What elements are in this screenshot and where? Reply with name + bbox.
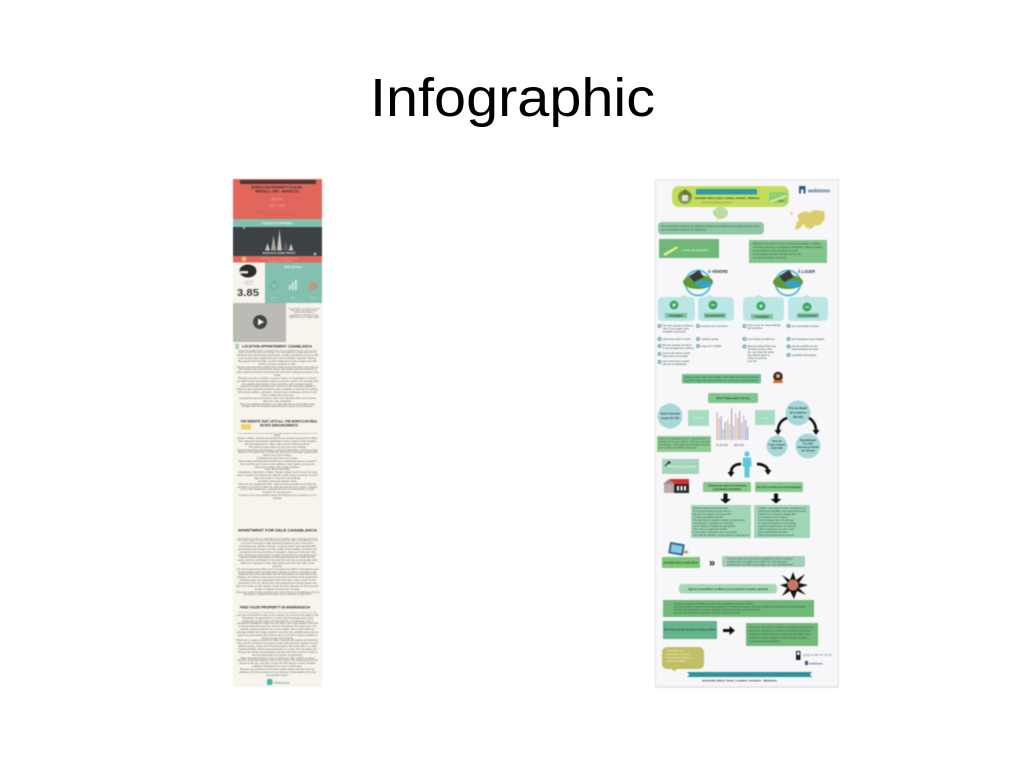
panel: rent disadvantages: Inconvénients [799, 314, 818, 318]
text block: Marrakech: Villas and apartments in recent residences offer modern comfort, security, pools and parking close to the shops, the restaurants and the airport of the city, and they remain the first choice of many families settling in Marrakech for work or retirement. [237, 656, 318, 668]
title: Infographic [370, 68, 655, 128]
text box: investment: de charges, votre rapport locatif après 20 ans [658, 442, 710, 446]
callout: key: Devenir propriétaire [669, 464, 697, 468]
heading: à louer: À LOUER [798, 268, 816, 274]
speech bubble: contact: vente et location [667, 659, 686, 663]
circle: mortgage: sur 20 ans [801, 448, 815, 452]
text block: location: Visit each apartment before you sign and ask for the details of the charges and the deposit required by the owner of the property. [240, 403, 315, 408]
panel: right infographic, Webimmo [654, 178, 840, 688]
text box: renting details: à l'entretien de la maison [758, 515, 789, 519]
text pill: comparison: pour bien choisir vos décisions dans les prochaines années au Maroc [684, 378, 759, 382]
header banner: Immobilier Maroc Vente, Location, Annuaire - Webimmo [695, 196, 760, 200]
text box: agency details: sur tout le territoire marocain et pour tous vos biens [674, 610, 741, 614]
panel: red header: 1200 – 2015 [269, 204, 286, 208]
text box: buying details: Montant d'achat et remboursement [693, 506, 728, 510]
panel: dark chart with spikes [233, 227, 322, 256]
text box: buying details: de la maison et charge de copropriété [693, 524, 736, 528]
text box: investment: Ayant cet investissement de 1 million dirhams en [658, 436, 710, 440]
text box: answer: trouver un loyer adapté à votre budget familial [749, 636, 807, 640]
text box: answer: et à vos besoins quotidiens [749, 639, 781, 643]
video placeholder with play button [233, 303, 286, 342]
text block: beside video: Real estate in Morocco and the main offers for apartments, villas and houses in Casablanca, Marrakech and Rabat for every budget today [288, 308, 320, 319]
list: sale advantages: rentables (propriété) [662, 330, 686, 334]
circle: rent [766, 436, 788, 456]
text box: renting details: Location : vous payez un loyer mensuel et vous [758, 506, 807, 510]
panel: red note strip: and property sales in Morocco [267, 260, 293, 262]
list: sale disadvantages: produits pour l'entretien [701, 324, 729, 328]
text pill: comparison [682, 374, 761, 384]
list: rent advantages [743, 323, 781, 363]
webimmo logo: webimmo [807, 188, 830, 194]
text pill: agencies: Agence immobilière au Maroc pour la gestion locative optimale [688, 587, 768, 591]
text box: buying details: et une valeur importante pour vos enfants [693, 530, 738, 534]
panel: average price stat: Morocco [245, 284, 254, 286]
text block: announcements: New offers every day. [265, 468, 290, 471]
text box: renting details: facilement et aucune charge liée [758, 512, 797, 516]
text box: advice: Webimmo vous aide à trouver votre bien immobilier au Maroc, [753, 242, 821, 246]
text box: buying details: et votre mensualité actuelle [693, 515, 724, 519]
text box: buying details: de ce logement dans le temps avec un [693, 509, 731, 513]
panel: red note strip [233, 256, 322, 262]
list: rent disadvantages: pas de contrôle sur les [792, 344, 818, 348]
text box: renting details: profitez d'une flexibilité, vous pouvez déménager [758, 509, 806, 513]
circle: monthly payment: Ajout mensuel [660, 412, 680, 416]
text block: location: Owners and agencies publish their rental announcements every day so that tenants can compare the prices, the surface and the services of each apartment before contacting the advertiser directly by phone or by email. [237, 366, 318, 377]
contact logo: webimmo [808, 662, 823, 666]
bar chart [716, 408, 748, 447]
text box: renting details: votre budget reste limité par [758, 518, 794, 522]
list: rent advantages: de l'entretien [748, 326, 763, 330]
box: buying path: Achetez une maison ou devenez [708, 484, 747, 488]
circle: rent: $ 22 500 [772, 446, 783, 450]
text block: announcements: Each listing shows photographs, a precise description and the contact details of the advertiser, so that the visit can be arranged quickly and without any intermediary. [237, 449, 318, 457]
text box: agency details: avec des tarifs transparents, un service complet et un interlocuteur unique pour vos démarches [674, 608, 761, 612]
circle: rent: Prix du [772, 439, 782, 443]
text box: buying details: prêt pour vos projets sur le long terme [693, 512, 731, 516]
panel: rent advantages: Avantages [755, 314, 769, 318]
list: rent disadvantages: pas d'épargne accumulation [792, 337, 825, 341]
list: sale advantages: et d'aménagement intérieur [662, 346, 694, 350]
text box: advice: et de location par type de bien, prix et ville [753, 252, 802, 256]
box: web search: Immobilier Vente Location Maroc [664, 560, 699, 564]
callout: how to find: Louer ou Acheter? [682, 248, 709, 252]
list: sale advantages: libre de changer de décor [662, 343, 692, 347]
text block: announcements: Discover the neighbourhoods, read our buying guides and follow the evolution of prices to make the right decision for your project, whether it is a main residence, a second home or an investment in rental property for the long term. [238, 483, 317, 494]
text box: answer: visitez le logement et comparez les quartiers pour [749, 632, 811, 636]
box: buying: Acheter [694, 416, 703, 420]
heading: find property in Marrakech: FIND YOUR PROPERTY IN MARRAKECH [240, 604, 310, 610]
header banner: http://www.webimmo.ma/maroc [702, 201, 733, 204]
panel: sale advantages: Avantages [669, 314, 683, 318]
box: web search [662, 557, 700, 568]
list: sale disadvantages: risque de mobilité [701, 344, 722, 348]
circle: starting price: Prix de départ [789, 406, 807, 410]
contact phone [796, 651, 833, 660]
icon: hands burst [780, 572, 808, 599]
text block: announcements: The search engine filters by city, price and surface. [248, 446, 307, 449]
text box: answer: récentes, vérifiez le contrat et le dépôt de garantie, [749, 628, 811, 632]
list: rent advantages: milieu ou prévoir [748, 356, 767, 360]
contact phone: (212) 6 46 74 76 07 [803, 653, 833, 657]
text block: announcements: Casablanca, Marrakech, Rabat, Tangier, Agadir and Fes are the most active markets and gather the majority of the announcements, for both sale and rental, in new and old buildings. [237, 471, 318, 480]
text block: Marrakech [236, 612, 319, 676]
list: sale advantages: utile à vos projets, plus [662, 326, 690, 330]
text block: Marrakech: Riads are a unique investment: often restored with traditional materials, they can be converted into guest houses and generate regular income. Before buying, make sure that the property has a land title or a valid traditional deed, and be accompanied by a notary who will guide you through the whole administrative process, from the promise of sale to the final deed and the transfer of ownership. [237, 639, 318, 657]
text box: renting details: mais le paiement ne vous rend [758, 527, 795, 531]
circle: mortgage: Hypothèque [800, 438, 817, 442]
contact logo [805, 661, 823, 666]
panel: red header: RENTAL [271, 197, 283, 201]
arrow: right [723, 626, 735, 635]
arrow: right branch [757, 464, 772, 475]
text box: investment: appartement de type 100 m2, 5 000 dh mensuels [658, 440, 710, 444]
list: rent advantages: pour fini [748, 359, 757, 363]
footer logo [267, 679, 291, 685]
panel: teal prices: 300 prices [284, 265, 302, 269]
panel: dark chart with spikes: MOROCCO HOME PRICES [263, 251, 296, 255]
text pill: comparison: Acheter ou louer : selon votre situation, votre budget et le projet à long terme, [684, 375, 759, 379]
bar chart: $1 000 000 [716, 444, 729, 447]
heading: website announcements [240, 418, 318, 428]
text pill: search: au Maroc dans nos pages pour choisir votre futur logement [727, 560, 787, 564]
list: rent disadvantages [787, 324, 825, 357]
text pill: search: gratuitement, par ville et par budget, sur notre site Webimmo [727, 562, 794, 566]
text box: advice: sur tout le territoire marocain [753, 256, 787, 260]
text box: buying details: Plus de frais de notaire, impôts et assurances [693, 518, 746, 522]
panel: average price stat: 3.85 [237, 287, 259, 299]
circle: monthly payment [658, 404, 682, 428]
panel: sale disadvantages: Inconvénients [706, 314, 725, 318]
text box: buying details: sécurité de retraite, et des gains à long terme [693, 533, 750, 537]
circle: starting price [786, 400, 810, 426]
webimmo logo [799, 186, 830, 194]
text box: advice [749, 240, 827, 263]
box: question [663, 621, 717, 639]
text block: announcements: Contact us for any question about the listing of your property on our website. [239, 494, 316, 500]
panel: average price stat: average in [244, 281, 254, 283]
panel: average price stat [233, 262, 265, 303]
text box: renting details: le coût de location et de charge [758, 521, 797, 525]
text pill: introduction: Voici comment les annonces immobilières au Maroc et la plateforme vous aident à trouver votre [661, 224, 759, 228]
text block: location [236, 350, 319, 410]
icon: house on island, sale [683, 270, 713, 296]
text block: location: Consult the announcements, save your favourite offers and receive alerts for new properties. [239, 397, 316, 403]
list: sale advantages: source de revenu locatif [662, 351, 690, 355]
list: rent disadvantages: possibilité d'expulsion [792, 353, 817, 357]
text box: buying details: vous avez un logement familial [693, 527, 727, 531]
text block: announcements: Buyers, sellers, tenants and landlords can browse thousands of offers from agencies and private individuals in every region of the kingdom and find apartments, villas, riads, farms, land and offices. [238, 437, 317, 446]
text block: announcements: Compare prices per square metre. [258, 480, 297, 483]
icon: yellow sticker [241, 424, 251, 430]
text block: announcements [237, 432, 318, 502]
callout: key [662, 459, 699, 474]
panel: teal prices: Sales [291, 298, 295, 300]
icon: person [742, 451, 752, 478]
text box: renting details [754, 505, 810, 538]
speech bubble [713, 207, 728, 221]
list: sale advantages: patrimoine actif à vendre [662, 337, 691, 341]
circle: rent: loyer moyen [769, 442, 786, 446]
list: rent advantages: d'endroit durant votre [748, 347, 772, 351]
list: rent disadvantages: augmentations de loyer [792, 347, 819, 351]
ribbon footer [687, 672, 812, 677]
list: sale advantages [658, 324, 694, 366]
text block: announcements: Real estate professionals benefit from a dedicated space to present their portfolio and improve the visibility of their agency across the Moroccan market with regular updates. [239, 460, 316, 469]
box: renting path [755, 482, 803, 492]
list: sale advantages: pas de complications [662, 362, 687, 366]
icon: tablet [668, 542, 688, 556]
text box: agency details: Choisissez une agence immobilière de confiance pour la gestion de votre bien au Maroc : [674, 602, 754, 606]
text box: advice: en consultant toutes les offres de vente [753, 248, 799, 252]
map of Europe [790, 210, 825, 230]
text pill: introduction [658, 222, 764, 234]
circle: mortgage [796, 434, 820, 458]
box: buying [688, 410, 709, 426]
circle: monthly payment: moyen $1 100 [661, 416, 680, 420]
heading: website announcements: ESTATE ANNOUNCEMENTS [260, 422, 298, 428]
text box: answer: Pour louer une maison au Maroc, consultez les annonces [749, 625, 814, 629]
panel: red header: RENTALS, 1950 – MOROCCO [256, 188, 298, 194]
panel: sale disadvantages [698, 294, 734, 321]
speech bubble: contact: immobiliers au Maroc, [667, 656, 693, 660]
box: buying path [703, 482, 751, 492]
text pill: search: Trouvez toutes les annonces immobilières, vente et location [727, 556, 794, 560]
heading: apartment for sale: APARTMENT FOR SALE CASABLANCA [238, 528, 317, 532]
text block: location: Long term rental contracts are common in the economic capital of Morocco and seasonal rentals are also available in summer for visitors, with secure parking, elevators, terraces and concierge services in the recent residences of the city. [237, 385, 318, 397]
text box: renting details: pas propriétaire du bien [758, 530, 789, 534]
box: question: Q7. Si vous louez type de location de maison au Maroc [664, 628, 716, 632]
footer text: Immobilier Maroc Vente, Location, Annuaire - Webimmo [702, 678, 777, 682]
text box: investment: pour ce bien immobilier s'annonce [658, 446, 697, 450]
icon: location badge [236, 344, 239, 349]
list: rent advantages: pas d'achat du bâtiment [748, 337, 775, 341]
text pill: agencies [679, 584, 777, 594]
panel: teal prices [265, 262, 322, 303]
panel: rent disadvantages [788, 294, 828, 321]
panel: red header: of the Moroccan real estate market [262, 214, 293, 216]
list: sale disadvantages [697, 324, 729, 348]
text box: buying details [691, 505, 751, 538]
footer logo: Piktochart [274, 681, 291, 685]
arrow: down left [720, 494, 731, 504]
panel: sale advantages [658, 294, 695, 321]
text box: buying details: correctement, réparation et entretien [693, 521, 734, 525]
panel: today's offers strip: TODAY'S OFFERS [261, 222, 293, 226]
text pill: introduction: bien immobilier au Maroc sur Webimmo [661, 228, 707, 232]
list: sale advantages: disponible à la retraite [662, 354, 688, 358]
panel: teal prices: Rental [271, 296, 277, 300]
box: renting [755, 410, 775, 425]
text box: renting details: loyers augmentent avec le temps [758, 533, 795, 537]
list: sale advantages: pour personnes n'ayant [662, 359, 690, 363]
panel: today's offers strip [233, 219, 322, 227]
text block: announcements: Publishing an ad is free and simple. [257, 457, 298, 460]
list: rent advantages: des dépôts dans le [748, 353, 770, 357]
list: rent disadvantages: pas d'avantages fiscaux [792, 324, 820, 328]
circle: mortgage: $ 1 500 [803, 442, 813, 446]
heading pill: after 30 years [708, 393, 758, 403]
circle: starting price: 250 000 [793, 415, 803, 419]
speech bubble: contact [662, 647, 704, 672]
speech bubble: contact: pour tous vos projets [667, 652, 692, 656]
text box: renting details: supplémentaires pour vos besoins [758, 524, 797, 528]
speech bubble: contact: Contactez-nous [667, 648, 686, 652]
panel: left infographic, Moroccan property [232, 178, 323, 687]
text block: apartment for sale: Start your search today and find your future home in Casablanca among thousands of apartments listed on our website by agencies. [236, 591, 319, 596]
box: renting: Louer [761, 416, 769, 420]
panel: red note strip: Average rental price in Casablanca per year [262, 257, 299, 260]
panel: teal prices: Market [310, 296, 316, 300]
heading pill: after 30 years: Voici l'étape après 30 ans [716, 396, 750, 400]
list: rent advantages: dans le présent bien pas [748, 344, 776, 348]
circle: starting price: de la maison [790, 410, 807, 414]
bar chart: $500 000 [734, 444, 745, 447]
box: renting path: Mes frais de location pour un petit logement [757, 485, 801, 489]
text pill: search [722, 556, 805, 567]
list: sale disadvantages: mobilité réduite [701, 337, 719, 341]
arrow: double chevrons: » [709, 558, 715, 570]
text box: investment [657, 436, 711, 452]
header banner [672, 186, 789, 207]
text block: location: Whether you are a student, a young couple, an expatriate or a family, you will find the right address close to schools, shops, the tramway and the seaside promenade of the Corniche, with a simple search. [237, 377, 318, 386]
icon: medal [773, 372, 783, 383]
text box: agency details [663, 600, 814, 617]
heading: à vendre: À VENDRE [708, 268, 728, 274]
text box: agency details: suivi des locataires, encaissement des loyers, réparation et entretien du logement, assistance juridique et administrative pour les propriétaires [674, 604, 807, 608]
text block: apartment for sale [236, 538, 319, 598]
list: rent advantages: pas en prix de responsabilité [748, 323, 781, 327]
panel: red header [233, 179, 322, 219]
panel: red header: Property prices and rentals across the main cities [255, 210, 299, 214]
arrow: curved left [774, 418, 787, 435]
callout: how to find [659, 239, 719, 258]
list: rent advantages: vie, vos rêves de vente [748, 350, 775, 354]
text block: apartment for sale: Our announcements allow you to compare the offers of developers and private sellers and to contact them directly in order to arrange a visit, negotiate the price and obtain all the information you need about the charges, the delivery date and the payment schedule of the apartment, including taxes and registration fees and other costs to plan for the purchase in the city. Moroccans living abroad and foreign buyers are also very active on this market, which remains attractive in the long term thanks to regular demand from tenants. [236, 568, 319, 591]
arrow: left branch [728, 464, 741, 477]
arrow: down right [770, 494, 782, 504]
arrow: curved right [809, 418, 820, 435]
heading: location appartement: LOCATION APPARTEMENT CASABLANCA [242, 344, 312, 348]
panel: rent advantages [743, 294, 784, 321]
text box: answer [746, 623, 818, 646]
icon: house on island, rent [773, 270, 803, 296]
list: sale advantages: Prix bien ajustés au Maroc, [662, 324, 694, 328]
header banner: 2014 [778, 199, 785, 203]
panel: red header: MOROCCAN PROPERTY SCALES: [252, 184, 302, 190]
icon: house red roof [663, 479, 689, 493]
circle: mortgage: mensuel et intérêt [798, 445, 819, 449]
text box: advice: annonces gratuites à Casablanca, Marrakech, Rabat et ailleurs, [753, 245, 823, 249]
box: buying path: propriétaire immobilier [713, 487, 742, 491]
